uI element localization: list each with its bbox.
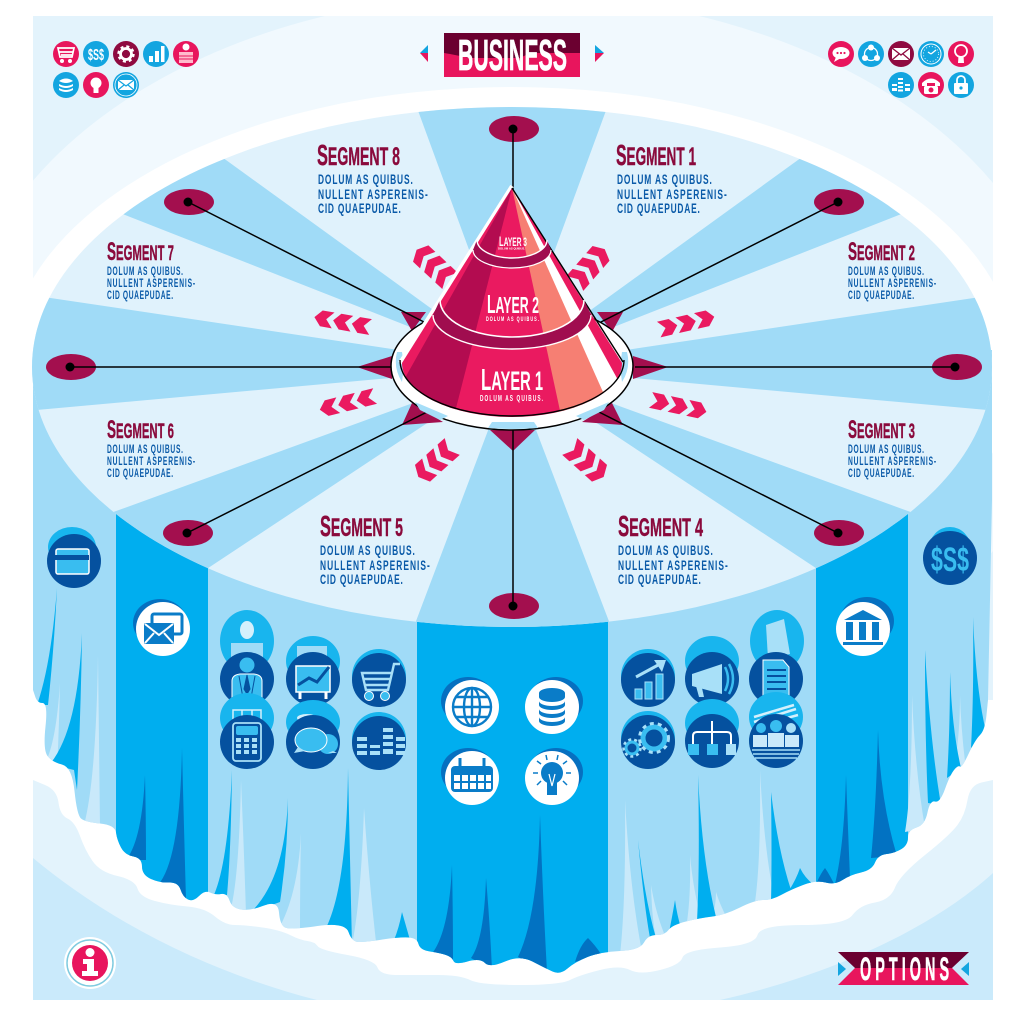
icon: telephone xyxy=(918,72,944,98)
icon: light bulb xyxy=(525,748,583,805)
icon: credit card xyxy=(47,527,101,588)
panel: segment 6 text xyxy=(107,416,195,479)
icon: businessman xyxy=(220,610,274,706)
icon: network xyxy=(858,41,884,67)
icon: dollars xyxy=(83,41,109,67)
panel: segment 4 text: CID QUAEPUDAE. xyxy=(618,573,701,588)
panel: segment 8 text: NULLENT ASPERENIS- xyxy=(318,188,428,203)
panel: segment 1 text: SEGMENT 1 xyxy=(616,140,696,172)
icon: info xyxy=(64,937,116,989)
panel: segment 3 text: NULLENT ASPERENIS- xyxy=(848,454,936,467)
options ribbon: OPTIONS xyxy=(860,953,949,988)
panel: segment 5 text: CID QUAEPUDAE. xyxy=(320,573,403,588)
icon: envelopes on white xyxy=(133,599,190,656)
icon: gears xyxy=(621,711,675,769)
panel: segment 4 text: NULLENT ASPERENIS- xyxy=(618,559,728,574)
label: layer 3: DOLUM AS QUIBUS. xyxy=(498,246,525,250)
chevron arrows xyxy=(313,241,716,485)
panel: segment 3 text xyxy=(848,416,936,479)
label: layer 3 xyxy=(498,233,527,250)
title: business: BUSINESS xyxy=(458,31,567,80)
panel: segment 6 text: NULLENT ASPERENIS- xyxy=(107,454,195,467)
panel: segment 3 text: DOLUM AS QUIBUS. xyxy=(848,442,924,455)
panel: segment 4 text: SEGMENT 4 xyxy=(618,511,703,543)
connector pointers xyxy=(357,312,668,451)
panel: segment 5 text: DOLUM AS QUIBUS. xyxy=(320,544,415,559)
cone highlight stripe xyxy=(512,188,618,392)
panel: segment 2 text: DOLUM AS QUIBUS. xyxy=(848,264,924,277)
panel: segment 7 text: NULLENT ASPERENIS- xyxy=(107,276,195,289)
icon: equalizer xyxy=(888,72,914,98)
panel: segment 7 text: DOLUM AS QUIBUS. xyxy=(107,264,183,277)
panel: segment 3 text: SEGMENT 3 xyxy=(848,416,915,444)
icon: bars xyxy=(143,41,169,67)
label: layer 1: LAYER 1 xyxy=(481,362,543,397)
cone base ring xyxy=(391,302,633,430)
layer band 3 xyxy=(473,240,551,268)
panel: segment 2 text xyxy=(848,238,936,301)
icon: dollar coin: $S$ xyxy=(931,541,969,579)
panel: segment 7 text: CID QUAEPUDAE. xyxy=(107,288,173,301)
label: layer 1 xyxy=(480,362,543,403)
title: business xyxy=(444,31,580,80)
panel: segment 6 text: SEGMENT 6 xyxy=(107,416,174,444)
top-right icon group xyxy=(828,41,974,98)
icon: gear xyxy=(113,41,139,67)
connector lines and pins xyxy=(46,116,982,619)
icon: coin stack xyxy=(525,677,583,734)
label: layer 1: DOLUM AS QUIBUS. xyxy=(480,395,543,403)
top-left icon group xyxy=(53,41,199,98)
layer band 2 xyxy=(433,300,591,349)
icon: bank xyxy=(836,597,894,656)
panel: segment 5 text xyxy=(320,511,430,588)
icon: envelope xyxy=(113,72,139,98)
icon: person xyxy=(173,41,199,67)
disc with eight segments xyxy=(32,107,992,627)
icon: shopping cart xyxy=(352,649,406,707)
icon: flow diagram xyxy=(685,699,739,768)
icon: bulb xyxy=(83,72,109,98)
icon: presentation board xyxy=(286,636,340,706)
panel: segment 6 text: DOLUM AS QUIBUS. xyxy=(107,442,183,455)
icon: document xyxy=(749,610,804,706)
icon: growth chart xyxy=(621,649,675,707)
icon: mail xyxy=(888,41,914,67)
icon: lock xyxy=(948,72,974,98)
panel: segment 5 text: SEGMENT 5 xyxy=(320,511,403,543)
panel: segment 2 text: CID QUAEPUDAE. xyxy=(848,288,914,301)
panel: segment 6 text: CID QUAEPUDAE. xyxy=(107,466,173,479)
white torn edge under drum xyxy=(33,690,993,985)
panel: segment 7 text: SEGMENT 7 xyxy=(107,238,174,266)
panel: segment 3 text: CID QUAEPUDAE. xyxy=(848,466,914,479)
cone shadow side xyxy=(405,188,512,420)
icon: coins xyxy=(53,72,79,98)
panel: segment 4 text xyxy=(618,511,728,588)
icon: right title arrow xyxy=(595,45,604,62)
pyramid cone xyxy=(400,186,624,420)
panel: segment 2 text: SEGMENT 2 xyxy=(848,238,915,266)
panel: segment 1 text xyxy=(616,140,727,217)
icon: lamp xyxy=(948,41,974,67)
icon: dollar coin xyxy=(923,527,977,585)
icon: team xyxy=(749,692,803,768)
panel: segment 2 text: NULLENT ASPERENIS- xyxy=(848,276,936,289)
icon: bar equalizer xyxy=(352,712,406,770)
label: layer 2: DOLUM AS QUIBUS. xyxy=(486,316,539,323)
icon: calendar xyxy=(441,748,499,805)
options ribbon xyxy=(838,952,969,988)
panel: segment 8 text: SEGMENT 8 xyxy=(317,140,400,172)
panel: segment 7 text xyxy=(107,238,195,301)
panel: segment 4 text: DOLUM AS QUIBUS. xyxy=(618,544,713,559)
panel: segment 8 text: CID QUAEPUDAE. xyxy=(318,202,401,217)
drum body with hanging panels xyxy=(33,350,993,1000)
label: layer 3: LAYER 3 xyxy=(499,233,527,249)
panel: segment 1 text: DOLUM AS QUIBUS. xyxy=(617,173,712,188)
panel: segment 8 text xyxy=(317,140,428,217)
icon: cart xyxy=(53,41,79,67)
icon: dollars: $S$ xyxy=(88,47,104,64)
icon: chat xyxy=(828,41,854,67)
label: layer 2 xyxy=(486,289,539,323)
icon: globe xyxy=(441,677,499,734)
icon: speech bubbles xyxy=(286,700,340,769)
icon: left title arrow xyxy=(420,45,428,62)
panel: segment 5 text: NULLENT ASPERENIS- xyxy=(320,559,430,574)
label: layer 2: LAYER 2 xyxy=(487,289,539,319)
cone lit side xyxy=(512,188,606,420)
panel: segment 1 text: CID QUAEPUDAE. xyxy=(617,202,700,217)
panel: segment 1 text: NULLENT ASPERENIS- xyxy=(617,188,727,203)
icon: megaphone xyxy=(685,636,739,706)
icon: clock xyxy=(918,41,944,67)
icon: calculator xyxy=(220,693,274,769)
panel: segment 8 text: DOLUM AS QUIBUS. xyxy=(318,173,413,188)
